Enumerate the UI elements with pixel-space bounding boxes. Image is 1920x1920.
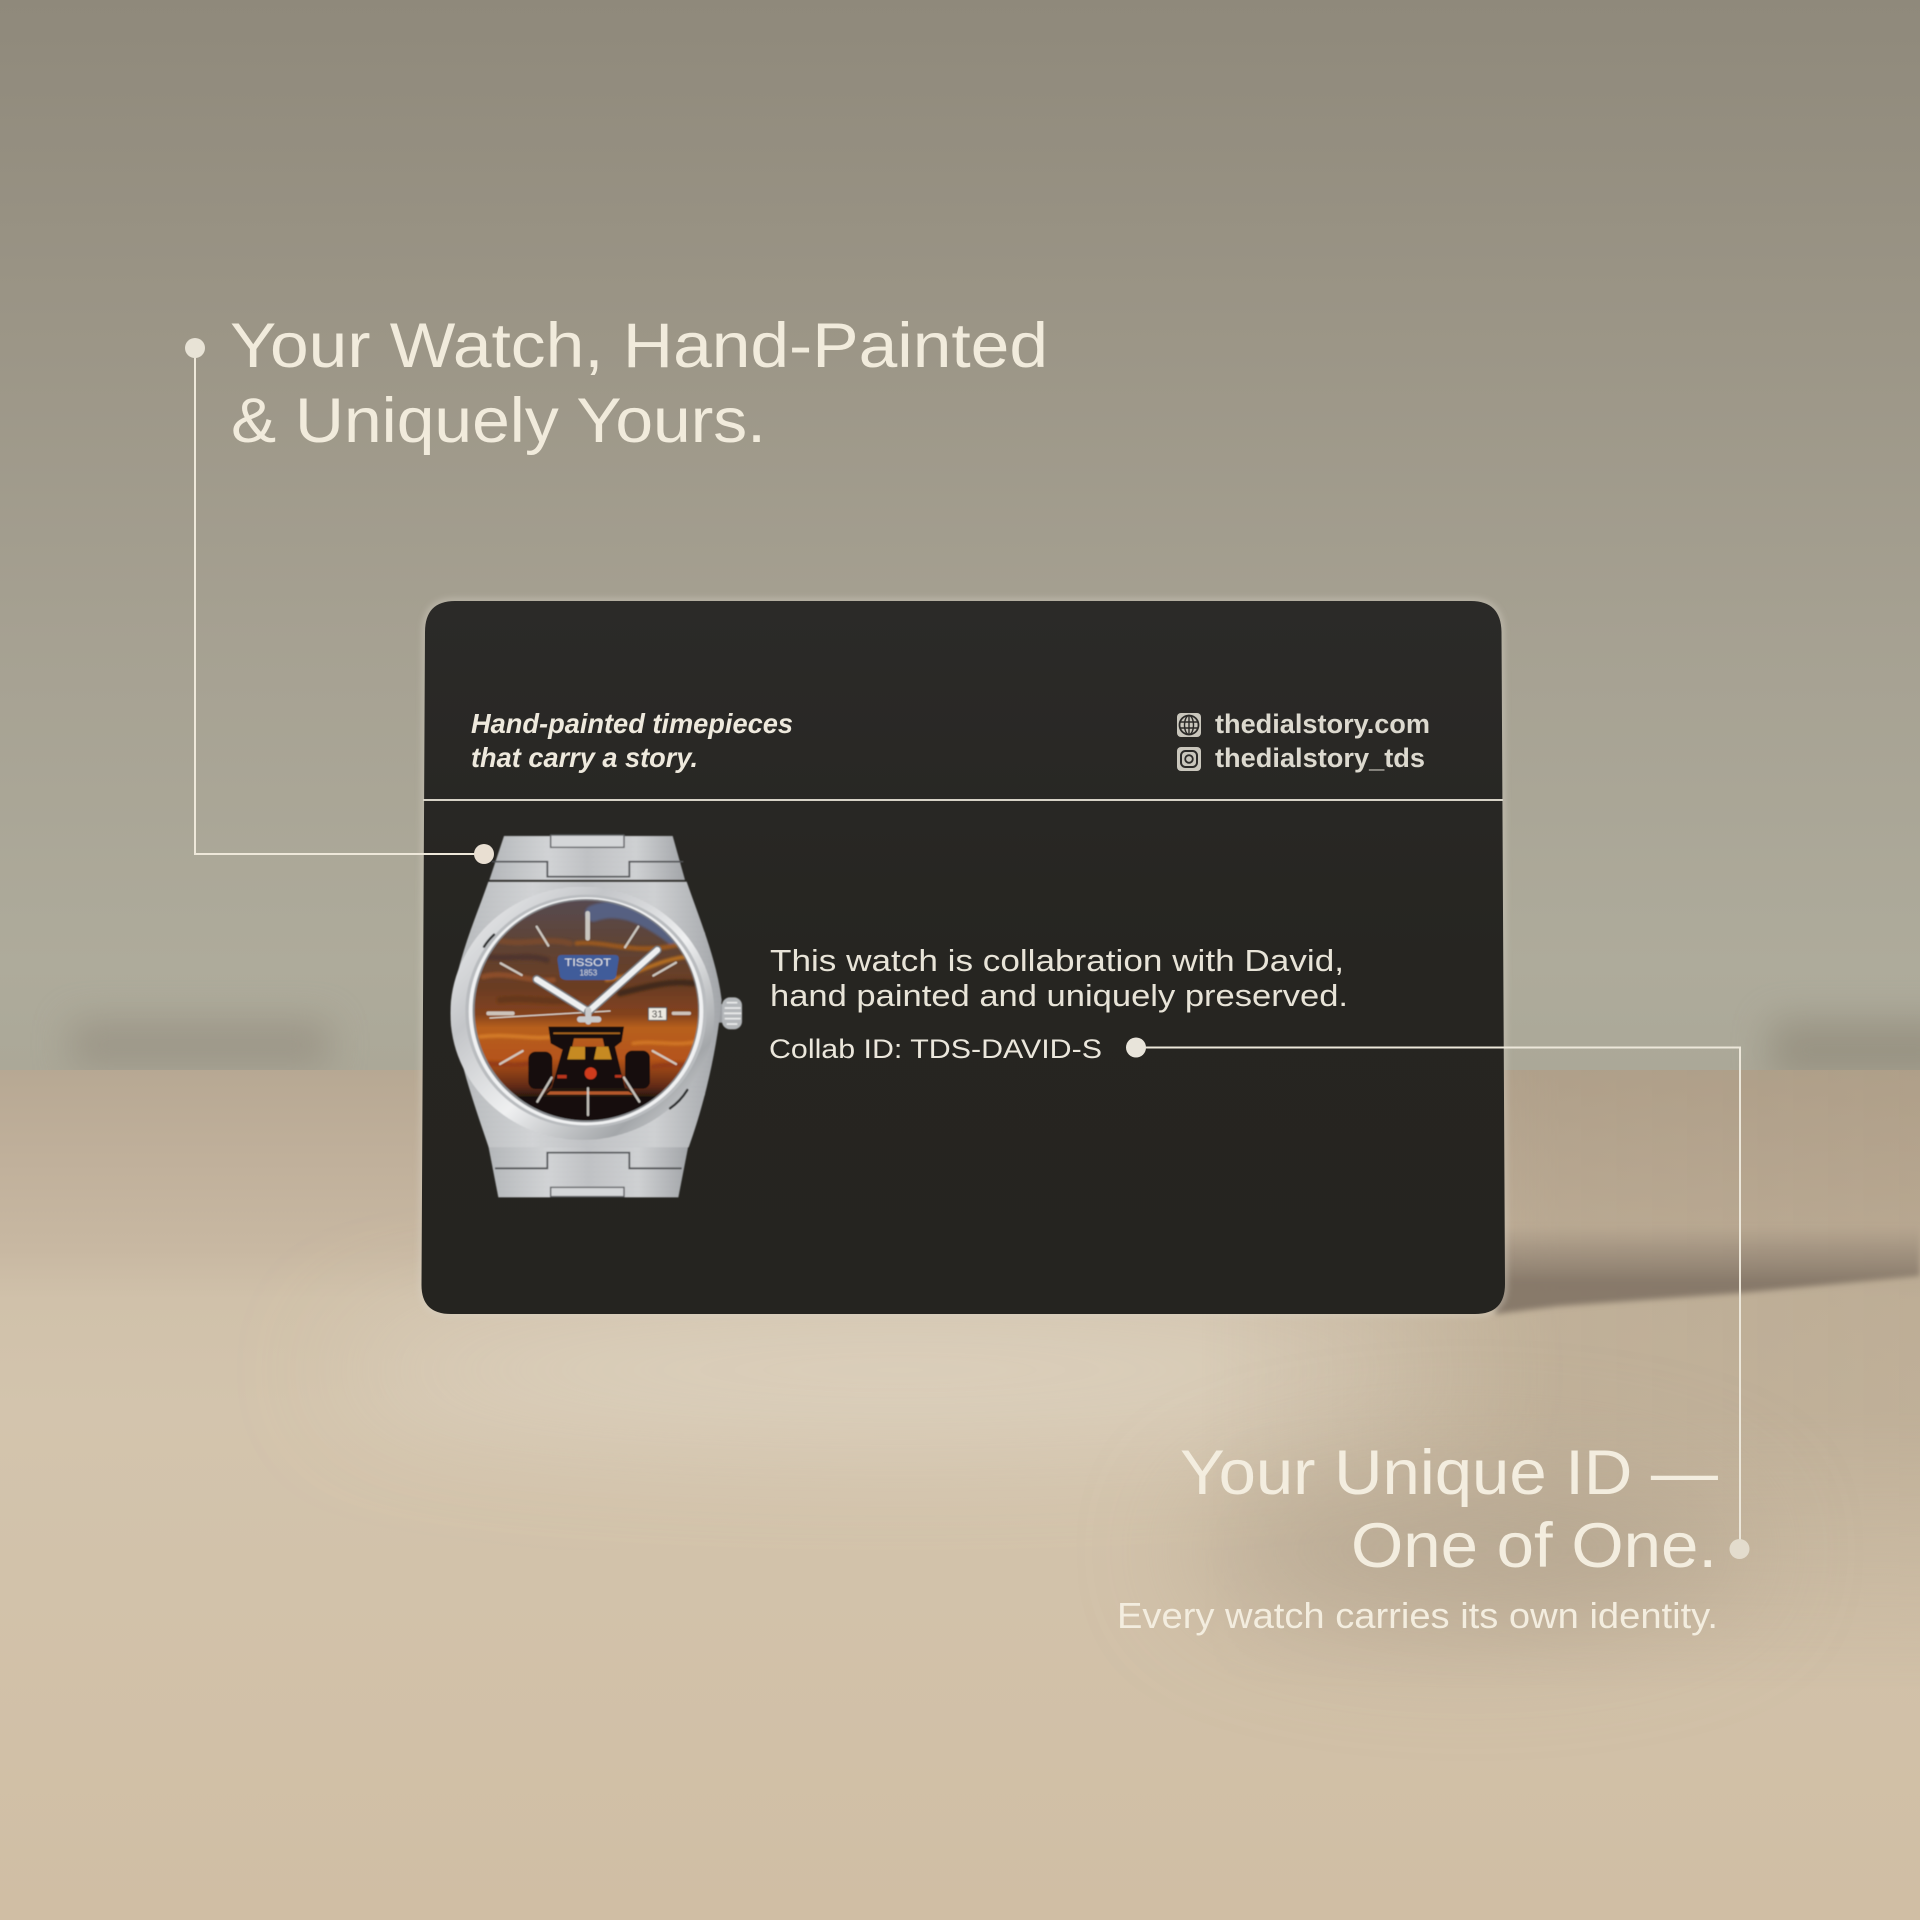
heading: unique id <box>1180 1438 1718 1581</box>
card body text: hand painted and uniquely preserved. <box>770 978 1348 1013</box>
background: wall <box>0 0 1920 1072</box>
background: table surface <box>0 1070 1920 1920</box>
card body text: This watch is collabration with David, <box>770 943 1344 978</box>
website text: thedialstory.com <box>1215 709 1430 739</box>
watch dial <box>473 898 700 1123</box>
table lighting and card shadow <box>450 1070 1920 1666</box>
date window: 31 <box>652 1010 663 1021</box>
heading: your watch: Your Watch, Hand-Painted <box>230 311 1048 381</box>
callout: watch leader line <box>185 338 494 864</box>
icon: instagram <box>1177 747 1201 771</box>
card body <box>421 601 1505 1314</box>
card divider <box>423 799 1503 801</box>
watch bracelet bottom <box>488 1146 688 1197</box>
heading: your watch <box>230 311 1048 456</box>
watch bracelet top <box>489 835 685 880</box>
card edge glow <box>421 601 1505 1314</box>
wall shading near the horizon <box>70 1020 1920 1080</box>
panel: black card <box>421 601 1505 1314</box>
instagram handle: thedialstory_tds <box>1215 743 1425 773</box>
hour markers <box>488 913 689 1115</box>
heading: unique id: One of One. <box>1351 1511 1717 1581</box>
TISSOT plaque: TISSOT <box>564 957 612 969</box>
watch hands <box>490 950 657 1022</box>
collab id: Collab ID: TDS-DAVID-S <box>769 1034 1102 1064</box>
F1 car silhouette <box>518 1026 655 1120</box>
card tagline: that carry a story. <box>471 742 698 773</box>
watch crown <box>709 997 742 1029</box>
heading: unique id: Your Unique ID — <box>1180 1438 1718 1508</box>
dial sky texture <box>480 910 697 1067</box>
TISSOT plaque <box>557 955 619 980</box>
subheading: identity: Every watch carries its own identity. <box>1117 1595 1718 1636</box>
heading: your watch: & Uniquely Yours. <box>231 386 766 456</box>
card tagline <box>471 708 793 773</box>
date window <box>648 1008 667 1021</box>
icon: globe <box>1177 713 1201 737</box>
card tagline: Hand-painted timepieces <box>471 708 793 739</box>
watch case <box>452 882 722 1147</box>
watch illustration <box>450 835 742 1197</box>
crystal highlight <box>473 900 699 1121</box>
TISSOT plaque: 1853 <box>579 969 598 978</box>
card body text <box>770 943 1348 1013</box>
watch bezel <box>450 887 714 1140</box>
callout: id leader line <box>1126 1038 1750 1559</box>
